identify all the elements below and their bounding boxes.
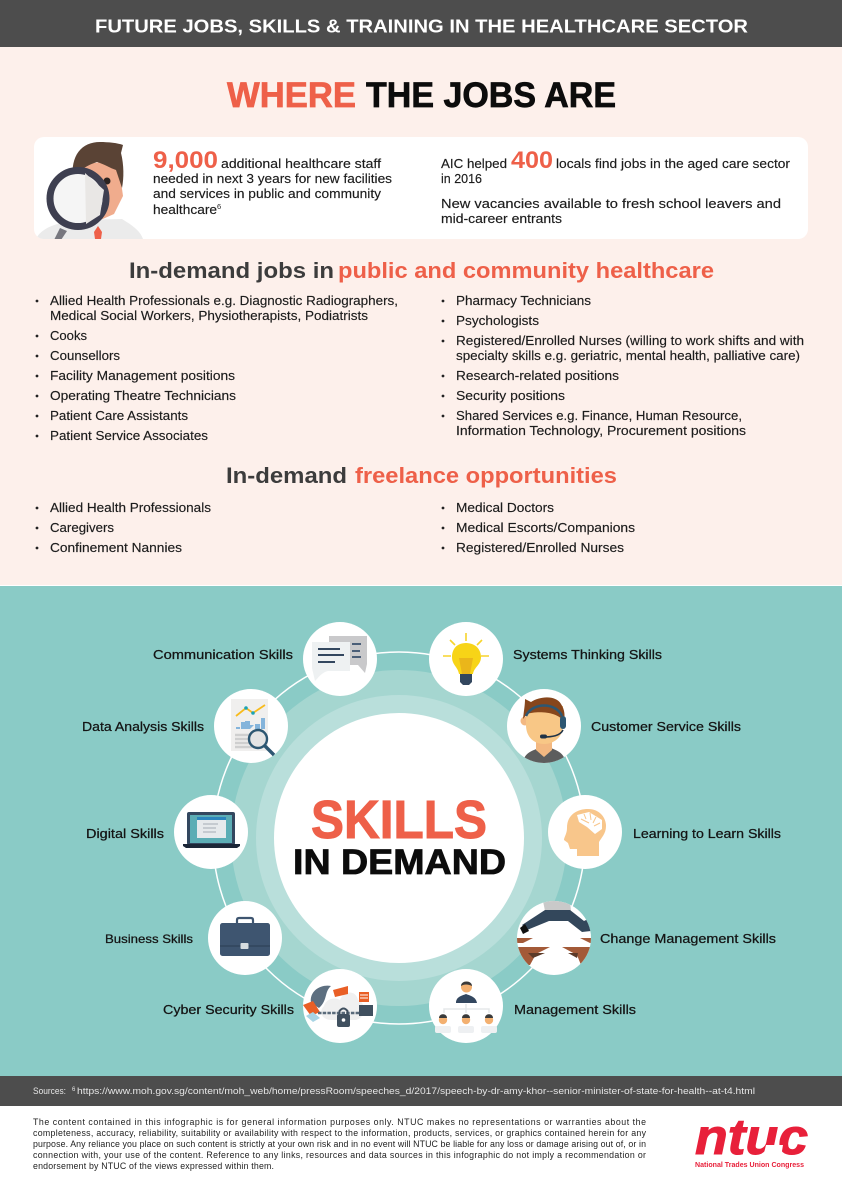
skill: cyber security: Cyber Security Skills xyxy=(163,1003,294,1017)
list: in-demand jobs right column: Pharmacy Technicians xyxy=(456,294,591,308)
sources bar: https://www.moh.gov.sg/content/moh_web/home/pressRoom/speeches_d/2017/speech-by-dr-amy-khor--senior-minister-of-state-for-health--at-t4.html xyxy=(77,1086,755,1097)
skill: digital xyxy=(86,795,248,869)
sources bar: 6 xyxy=(72,1087,76,1093)
heading: in-demand freelance: In-demand xyxy=(226,463,347,488)
disclaimer text: endorsement by NTUC of the views expressed within them. xyxy=(33,1161,274,1171)
list: in-demand jobs left column xyxy=(36,294,398,443)
list: freelance left column: Confinement Nannies xyxy=(50,541,182,555)
disclaimer text: connection with, your use of the content. Reference to any links, resources and data sources in this infographic do not imply a recommendation or xyxy=(33,1150,646,1160)
list: in-demand jobs left column: Medical Social Workers, Physiotherapists, Podiatrists xyxy=(50,309,368,323)
header bar: FUTURE JOBS, SKILLS & TRAINING IN THE HEALTHCARE SECTOR xyxy=(95,16,748,36)
list: in-demand jobs right column: Psychologists xyxy=(456,314,539,328)
heading: in-demand jobs: public and community healthcare xyxy=(338,258,714,283)
heading: skills in demand: IN DEMAND xyxy=(293,843,506,882)
skill: business: Business Skills xyxy=(105,932,193,946)
skill: data analysis xyxy=(82,689,288,763)
skill: systems thinking xyxy=(429,622,662,696)
stat: 9,000 additional staff: healthcare xyxy=(153,203,217,217)
list: in-demand jobs right column: Information Technology, Procurement positions xyxy=(456,424,746,438)
panel: where the jobs are xyxy=(0,47,842,585)
stat: 400 locals: New vacancies available to fresh school leavers and xyxy=(441,197,781,211)
stat: 400 locals xyxy=(441,147,790,226)
skill: data analysis: Data Analysis Skills xyxy=(82,720,204,734)
heading: skills in demand xyxy=(293,790,506,882)
stat: 9,000 additional staff: additional healthcare staff xyxy=(221,157,382,171)
stat: 400 locals: AIC helped xyxy=(441,157,507,171)
icon: man with magnifying glass xyxy=(36,142,143,240)
logo: ntuc: ntuc xyxy=(695,1109,808,1165)
list: in-demand jobs left column: Counsellors xyxy=(50,349,120,363)
skill: learning to learn: Learning to Learn Skills xyxy=(633,827,781,841)
skill: communication xyxy=(153,622,377,696)
list: in-demand jobs right column: Security positions xyxy=(456,389,565,403)
stat: 9,000 additional staff xyxy=(153,147,392,217)
heading: in-demand freelance xyxy=(226,463,617,488)
disclaimer text: completeness, accuracy, reliability, suitability or availability with respect to the information, products, services, or graphics contained herein for any xyxy=(33,1128,647,1138)
heading: where the jobs are: THE JOBS ARE xyxy=(366,76,616,115)
skill: management: Management Skills xyxy=(514,1003,636,1017)
heading: skills in demand: SKILLS xyxy=(311,790,487,850)
list: in-demand jobs left column: Patient Care Assistants xyxy=(50,409,188,423)
list: freelance right column xyxy=(442,501,635,555)
skill: change management: Change Management Skills xyxy=(600,932,776,946)
list: freelance left column: Caregivers xyxy=(50,521,114,535)
logo: ntuc: National Trades Union Congress xyxy=(695,1160,804,1169)
skill: business xyxy=(105,901,282,975)
list: freelance left column: Allied Health Professionals xyxy=(50,501,211,515)
list: in-demand jobs left column: Operating Theatre Technicians xyxy=(50,389,236,403)
skill: learning to learn xyxy=(548,795,781,869)
stat: 400 locals: locals find jobs in the aged care sector xyxy=(556,157,790,171)
skill: digital: Digital Skills xyxy=(86,827,164,841)
stat: 400 locals: mid-career entrants xyxy=(441,212,562,226)
list: in-demand jobs right column: Research-related positions xyxy=(456,369,619,383)
list: freelance left column xyxy=(36,501,211,555)
heading: where the jobs are: WHERE xyxy=(227,76,356,115)
list: in-demand jobs left column: Allied Health Professionals e.g. Diagnostic Radiographers, xyxy=(50,294,398,308)
skill: cyber security xyxy=(163,969,377,1043)
skill: change management xyxy=(517,901,776,975)
header bar xyxy=(0,0,842,47)
stat: 400 locals: 400 xyxy=(511,147,553,174)
panel: skills in demand xyxy=(0,586,842,1076)
stat: 9,000 additional staff: 6 xyxy=(217,202,221,211)
stat: 9,000 additional staff: 9,000 xyxy=(153,147,218,174)
list: in-demand jobs right column xyxy=(442,294,804,438)
stats card xyxy=(34,137,808,240)
heading: where the jobs are xyxy=(227,76,616,115)
list: in-demand jobs left column: Cooks xyxy=(50,329,87,343)
heading: in-demand jobs: In-demand jobs in xyxy=(129,258,334,283)
disclaimer text: The content contained in this infographic is for general information purposes only. NTUC makes no representations or warranties about the xyxy=(33,1117,646,1127)
list: in-demand jobs left column: Facility Management positions xyxy=(50,369,235,383)
list: freelance right column: Medical Escorts/Companions xyxy=(456,521,635,535)
heading: in-demand freelance: freelance opportunities xyxy=(355,463,617,488)
skill: communication: Communication Skills xyxy=(153,648,293,662)
heading: in-demand jobs xyxy=(129,258,714,283)
list: freelance right column: Medical Doctors xyxy=(456,501,554,515)
list: in-demand jobs right column: specialty skills e.g. geriatric, mental health, palliative care) xyxy=(456,349,800,363)
list: in-demand jobs right column: Shared Services e.g. Finance, Human Resource, xyxy=(456,409,742,423)
sources bar xyxy=(0,1076,842,1106)
disclaimer text: purpose. Any reliance you place on such content is strictly at your own risk and in no event will NTUC be liable for any loss or damage arising out of, or in xyxy=(33,1139,646,1149)
skill: systems thinking: Systems Thinking Skills xyxy=(513,648,662,662)
skill: customer service: Customer Service Skills xyxy=(591,720,741,734)
skill: management xyxy=(429,969,636,1043)
stat: 400 locals: in 2016 xyxy=(441,172,482,186)
list: in-demand jobs right column: Registered/Enrolled Nurses (willing to work shifts and with xyxy=(456,334,804,348)
stat: 9,000 additional staff: and services in public and community xyxy=(153,187,382,201)
sources bar: Sources: xyxy=(33,1086,66,1097)
skill: customer service xyxy=(507,689,741,763)
list: in-demand jobs left column: Patient Service Associates xyxy=(50,429,208,443)
stat: 9,000 additional staff: needed in next 3 years for new facilities xyxy=(153,172,392,186)
list: freelance right column: Registered/Enrolled Nurses xyxy=(456,541,624,555)
disclaimer text xyxy=(33,1117,647,1171)
concentric rings xyxy=(213,652,585,1024)
